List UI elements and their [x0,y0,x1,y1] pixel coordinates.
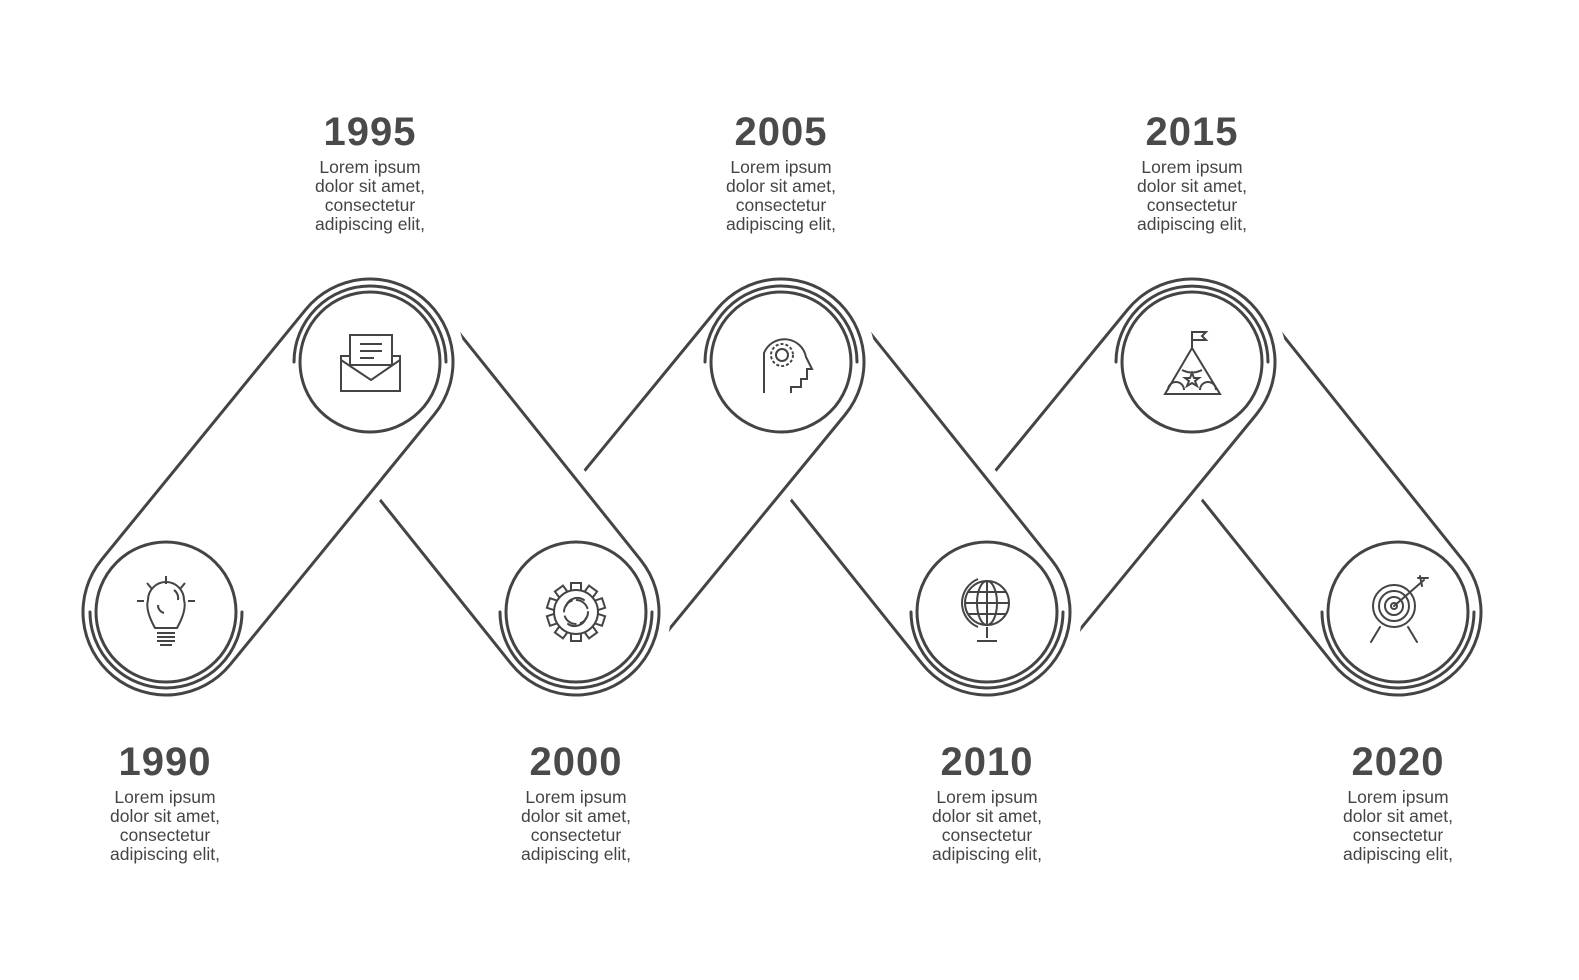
text: 2005: dolor sit amet, [726,176,836,196]
text: 2000: dolor sit amet, [521,806,631,826]
text: 1990: dolor sit amet, [110,806,220,826]
text: 2010: dolor sit amet, [932,806,1042,826]
text: 2005: 2005 [734,110,827,154]
text: 2015 [1137,110,1247,234]
text: 1995: Lorem ipsum [319,157,421,177]
text: 2020: 2020 [1352,740,1444,784]
capsule 5 [987,362,1192,612]
text: 1990: adipiscing elit, [110,844,220,864]
icon: envelope [341,335,400,391]
text: 1990: Lorem ipsum [114,787,216,807]
text: 1995: dolor sit amet, [315,176,425,196]
text: 2020 [1343,740,1453,864]
text: 2010 [932,740,1042,864]
text: 1995: consectetur [325,195,415,215]
icon: tent with flag [1165,332,1220,394]
text: 2020: dolor sit amet, [1343,806,1453,826]
text: 2010: consectetur [942,825,1032,845]
capsule 6 [1198,362,1398,612]
capsule 4 [787,362,987,612]
text: 1995: adipiscing elit, [315,214,425,234]
text: 2015: consectetur [1147,195,1237,215]
text: 2010: 2010 [940,740,1033,784]
icon: gear [547,583,605,641]
capsule 3 [576,362,781,612]
text: 2000: Lorem ipsum [525,787,627,807]
text: 2005: adipiscing elit, [726,214,836,234]
text: 1995 [315,110,425,234]
text: 2000 [521,740,631,864]
inner cap arcs [90,286,1474,688]
text: 2015: adipiscing elit, [1137,214,1247,234]
icon: head with gear [764,339,812,393]
node circles [96,292,1468,682]
text: 2020: Lorem ipsum [1347,787,1449,807]
capsule 1 [166,362,370,612]
text: 1990 [110,740,220,864]
text: 1990: consectetur [120,825,210,845]
text: 2000: adipiscing elit, [521,844,631,864]
text: 2020: consectetur [1353,825,1443,845]
text: 1995: 1995 [324,110,416,154]
text: 2015: Lorem ipsum [1141,157,1243,177]
text: 2010: Lorem ipsum [936,787,1038,807]
text: 1990: 1990 [118,740,211,784]
icon: light bulb [137,576,195,645]
text: 2000: 2000 [530,740,622,784]
capsule 2 [376,362,576,612]
text: 2005 [726,110,836,234]
text: 2005: consectetur [736,195,826,215]
icon: target [1371,576,1428,642]
text: 2020: adipiscing elit, [1343,844,1453,864]
text: 2015: 2015 [1146,110,1238,154]
text: 2000: consectetur [531,825,621,845]
icon: globe [962,579,1009,641]
text: 2015: dolor sit amet, [1137,176,1247,196]
text: 2010: adipiscing elit, [932,844,1042,864]
text: 2005: Lorem ipsum [730,157,832,177]
